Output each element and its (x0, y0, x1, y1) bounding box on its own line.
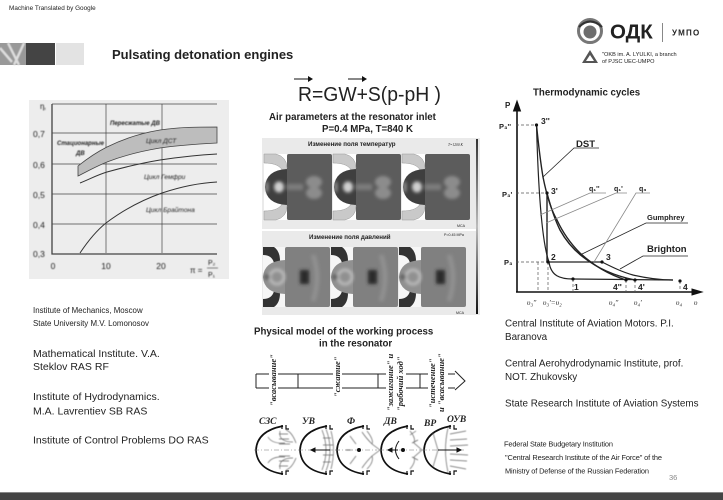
chart labels: Цикл Брайтона (146, 206, 195, 214)
chart labels: q₃ (639, 186, 647, 193)
diagram: resonator stages: "сжатие" (332, 356, 342, 397)
chart labels: 0,6 (33, 160, 45, 170)
chart labels: Gumphrey (647, 213, 685, 222)
chart labels: 3' (551, 186, 558, 196)
phase labels: ВР (423, 419, 436, 429)
panel: thermodynamic cycles: υ₃'' (527, 298, 537, 307)
phase labels (259, 415, 466, 429)
diagram: resonator stages: и "всасывание" (436, 353, 446, 412)
chart labels: 0,3 (33, 249, 45, 259)
chart labels: Цикл ДСТ (146, 138, 177, 145)
cycle curves (536, 125, 673, 280)
icon: ODK swirl (578, 20, 602, 42)
formula: R=GW+S(p-pH ) (298, 83, 441, 106)
chart labels: π = (190, 266, 203, 275)
heading: air parameters (269, 112, 437, 135)
chart labels: 0,5 (33, 190, 45, 200)
chart labels: q₁' (614, 186, 623, 193)
icon: Lyulka triangle (582, 50, 598, 63)
phase labels: УВ (302, 417, 315, 427)
chart labels: 0,4 (33, 220, 45, 230)
panel: efficiency chart (29, 100, 229, 279)
dashed guides (516, 125, 680, 292)
diagram: resonator stages: "всасывание" (268, 354, 278, 406)
phase labels: Ф (347, 417, 355, 427)
diagram: resonator stages: "рабочий ход" (395, 356, 405, 411)
heading: physical model: Physical model of the working process (254, 326, 433, 338)
left text: institutes: M.A. Lavrentiev SB RAS (33, 406, 147, 418)
right text: federal institution (504, 440, 662, 476)
left text: institutes: Institute of Control Problems DO RAS (33, 434, 209, 446)
chart labels: ДВ (75, 151, 85, 157)
chart labels: 4 (683, 282, 688, 292)
curve: Humphrey cycle (80, 154, 217, 183)
left text: institutes: Institute of Hydrodynamics. (33, 391, 160, 403)
phase flow lines (268, 428, 468, 472)
leader lines (543, 148, 688, 269)
right text: institutes: NOT. Zhukovsky (505, 372, 577, 383)
page number: 36 (669, 473, 677, 482)
temperature field row: MCA (457, 224, 466, 228)
axes (514, 101, 702, 295)
pressure field row: Изменение поля давлений (309, 234, 391, 241)
chart labels: Пересжатые ДВ (110, 121, 161, 127)
heading: physical model: in the resonator (319, 338, 392, 350)
logo: ODK UMPO: ОДК (610, 20, 653, 44)
chart labels: P₁ (208, 272, 216, 279)
colour scale (476, 139, 478, 314)
right text: institutes: State Research Institute of Aviation Systems (505, 398, 699, 410)
chart labels: Цикл Гемфри (144, 174, 186, 181)
right text: institutes (505, 318, 699, 410)
diagram: resonator stages (256, 352, 465, 412)
panel: thermodynamic cycles: υ₃'=υ₂ (543, 298, 562, 307)
left text: institutes (33, 348, 209, 446)
title: Pulsating detonation engines (112, 47, 293, 62)
header note: Machine Translated by Google (9, 5, 96, 12)
chart labels: 3 (606, 252, 611, 262)
diagram: resonator stages: "истечение" (427, 358, 437, 408)
pressure field row (263, 233, 466, 315)
chart labels: 0,7 (33, 129, 45, 139)
left text: institute of mechanics: State University M.V. Lomonosov (33, 319, 149, 328)
right text: federal institution: "Central Research Institute of the Air Force" of the (505, 453, 662, 462)
logo: ODK UMPO: УМПО (672, 28, 700, 38)
phase details (311, 441, 461, 459)
panel: thermodynamic cycles: υ₄ (676, 298, 682, 307)
heading: air parameters: P=0.4 MPa, T=840 K (322, 124, 413, 135)
chart labels (499, 101, 688, 292)
cycle points (535, 123, 682, 283)
chart labels: P₃' (502, 190, 512, 199)
phase labels: СЗС (259, 417, 277, 427)
pressure field row: MCA (456, 311, 465, 315)
phase labels: ОУВ (447, 415, 466, 425)
right text: institutes: Central Aerohydrodynamic Institute, prof. (505, 358, 683, 370)
chart labels: η (40, 102, 44, 111)
heading: Thermodynamic cycles (533, 88, 640, 98)
chart grid and axes (52, 104, 217, 254)
chart labels: 1 (574, 282, 579, 292)
chart labels: t (44, 106, 46, 111)
logo: ODK UMPO: "OKB im. A. LYULKI, a branch (602, 52, 677, 58)
chart labels: Стационарные (57, 141, 105, 147)
heading: physical model (254, 326, 433, 350)
panel: thermodynamic cycles: υ (694, 298, 698, 307)
right text: federal institution: Ministry of Defense of the Russian Federation (505, 466, 649, 476)
panel: thermodynamic cycles: υ₄'' (609, 298, 619, 307)
chart labels: q₁'' (589, 186, 600, 193)
chart labels: P₃ (504, 258, 513, 267)
right text: institutes: Central Institute of Aviation Motors. P.I. (505, 318, 674, 330)
chart labels: P₂ (208, 260, 216, 267)
temperature field row: Изменение поля температур (308, 141, 396, 148)
chart labels: 4' (638, 282, 645, 292)
diagram: resonator stages: "зажигание" и (385, 353, 395, 411)
chart labels: 3'' (541, 116, 550, 126)
left text: institutes: Steklov RAS RF (33, 361, 109, 373)
logo: ODK UMPO (578, 20, 700, 65)
left text: institute of mechanics (33, 306, 149, 328)
temperature field row (264, 141, 470, 228)
right text: institutes: Baranova (505, 332, 548, 343)
panel: simulation fields (262, 138, 480, 315)
chart labels (33, 102, 218, 279)
temperature field row: T=1200 K (448, 143, 464, 147)
chart labels: 10 (101, 261, 111, 271)
left text: institute of mechanics: Institute of Mechanics, Moscow (33, 306, 143, 315)
chart labels: P (505, 101, 511, 110)
curve: Brayton cycle (80, 182, 217, 253)
right text: federal institution: Federal State Budgetary Institution (504, 440, 613, 448)
chart labels: Brighton (647, 244, 687, 255)
chart labels: 20 (156, 261, 166, 271)
diagram: detonation phases (254, 415, 468, 475)
band: DST cycle (78, 127, 217, 176)
panel: thermodynamic cycles (499, 88, 702, 307)
phase labels: ДВ (383, 417, 397, 427)
header decorative image strip (0, 43, 84, 65)
left text: institutes: Mathematical Institute. V.A. (33, 348, 160, 360)
chart labels: DST (576, 139, 595, 150)
chart labels: 4'' (613, 282, 622, 292)
pressure field row: P=0.45 MPa (444, 233, 464, 237)
panel: thermodynamic cycles: υ₄' (634, 298, 642, 307)
heading: air parameters: Air parameters at the resonator inlet (269, 112, 437, 123)
chart labels: 2 (551, 252, 556, 262)
footer bar (0, 492, 723, 500)
chart labels: 0 (51, 261, 56, 271)
logo: ODK UMPO: of PJSC UEC-UMPO (602, 59, 655, 65)
chart labels: P₃'' (499, 122, 511, 131)
